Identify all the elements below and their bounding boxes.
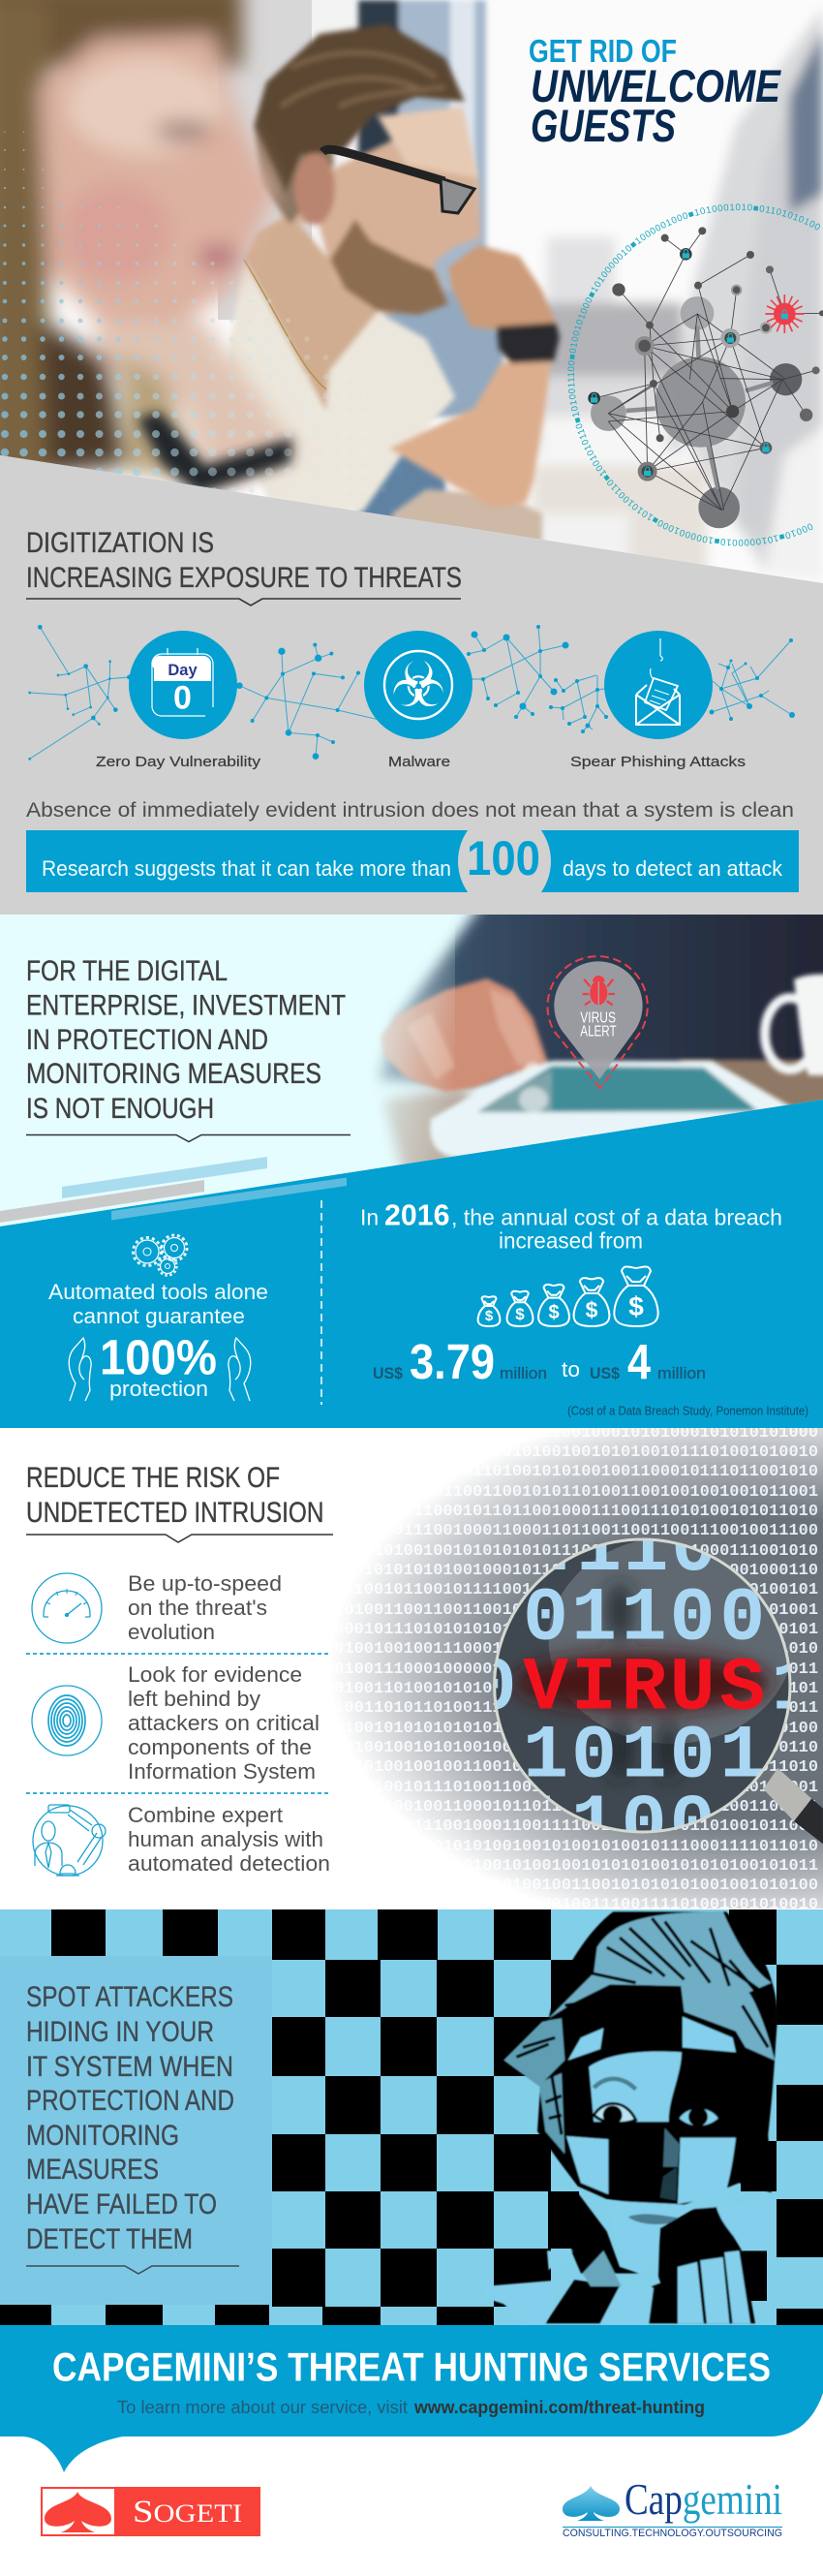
icon: magnifying glass over virus: VIRUS (523, 1645, 765, 1731)
icon: money bags: $ (515, 1305, 525, 1323)
figures: US$3.79 million to US$4 million: US$ (373, 1364, 404, 1382)
binary background: 00101011001001010101001001100101010101001001010100 (324, 1877, 818, 1895)
network lines right (467, 625, 795, 733)
panel: footer call-to-action bubble: www.capgemini.com/threat-hunting (413, 2398, 705, 2417)
logo: Capgemini: CONSULTING.TECHNOLOGY.OUTSOURCING (563, 2528, 782, 2539)
heading: IN PROTECTION AND (26, 1024, 268, 1056)
heading: FOR THE DIGITAL (26, 955, 228, 987)
text: data breach cost: , the annual cost of a data breach (451, 1205, 782, 1230)
decorative stripes (0, 1157, 267, 1223)
binary background: 10101010101010100100011100100010101000101010101000 (324, 1424, 818, 1443)
icon: magnifying glass over virus: 01100 (523, 1576, 765, 1662)
figures: US$3.79 million to US$4 million: to (562, 1357, 580, 1381)
halftone dots (0, 131, 384, 493)
icon: money bags: $ (628, 1291, 644, 1321)
icon: person and robot arm (33, 1805, 106, 1876)
logo: Capgemini (563, 2474, 782, 2539)
figures: US$3.79 million to US$4 million (373, 1334, 706, 1389)
heading: HIDING IN YOUR (26, 2016, 214, 2048)
text: data breach cost (360, 1198, 782, 1254)
icon: zero day calendar: 0 (173, 680, 192, 717)
item: evidence: left behind by (128, 1687, 260, 1711)
item: threat evolution: Be up-to-speed (128, 1571, 282, 1596)
man figure (223, 24, 560, 512)
item: human and automated: Combine expert (128, 1803, 283, 1827)
icon: money bags: $ (485, 1308, 494, 1324)
title (529, 34, 781, 151)
item: threat evolution: evolution (128, 1620, 215, 1644)
binary background: 10001011101010101011001010110100101001010110010101 (324, 1621, 818, 1639)
text: automated tools: protection (109, 1377, 208, 1401)
icon: zero day calendar: Day (168, 662, 198, 679)
logo: Sogeti: SOGETI (133, 2495, 242, 2529)
blurred woman foreground (0, 0, 300, 494)
icon: magnifying glass over virus: 110101 (465, 1713, 765, 1799)
figures: US$3.79 million to US$4 million: million (657, 1364, 706, 1382)
icon: magnifying glass over virus: 1 (772, 1645, 817, 1731)
icon: magnifying glass over virus (493, 1538, 823, 1845)
binary background: 11110100100100110010100100101001011010010101011010 (324, 1758, 818, 1777)
icon: virus alert pin: ALERT (580, 1023, 617, 1040)
binary background: 10100101010101010100101001010010100101001011010100 (324, 1720, 818, 1738)
heading: IS NOT ENOUGH (26, 1093, 214, 1125)
binary background: 10101010010011000101101100110010011001101001100101 (324, 1798, 818, 1816)
binary background: 00100111000100000101001010101001010100110100101011 (324, 1660, 818, 1679)
heading (26, 1462, 333, 1542)
heading: MONITORING MEASURES (26, 1058, 321, 1090)
icon: speedometer (32, 1573, 102, 1643)
icon: virus alert pin (547, 956, 648, 1088)
binary background: 00100110100101010110101001001011001010010010100101 (324, 1680, 818, 1698)
icon: money bags (478, 1266, 658, 1326)
title: GUESTS (531, 100, 676, 151)
panel: footer call-to-action bubble: To learn more about our service, visit (117, 2398, 408, 2417)
binary background: 11010011001100110010010110100101101010001011001001 (324, 1601, 818, 1620)
callout: 100 days: 100 (467, 831, 540, 885)
item: evidence: attackers on critical (128, 1711, 320, 1735)
heading: INCREASING EXPOSURE TO THREATS (26, 562, 462, 594)
icon: fingerprint (32, 1686, 102, 1755)
figures: US$3.79 million to US$4 million: million (500, 1364, 547, 1382)
icon: magnifying glass over virus: 11100 (523, 1506, 769, 1593)
text: data breach cost: increased from (499, 1228, 643, 1254)
callout: 100 days (26, 830, 799, 892)
binary background: 01010010010101001001010100100100101011001010100110 (324, 1739, 818, 1757)
heading: MONITORING (26, 2120, 179, 2152)
logo: Sogeti (41, 2487, 260, 2536)
icon: money bags: $ (548, 1302, 560, 1323)
panel: digitization section (0, 455, 823, 915)
text: automated tools: 100% (100, 1330, 217, 1385)
panel: digital enterprise section (0, 901, 823, 1428)
callout: 100 days: days to detect an attack (563, 856, 783, 881)
text: data breach cost: 2016 (384, 1198, 449, 1232)
threat labels: Spear Phishing Attacks (570, 754, 746, 770)
heading: ENTERPRISE, INVESTMENT (26, 989, 346, 1021)
icon: red virus node (765, 295, 804, 333)
icon: magnifying glass over virus: 0 (472, 1645, 517, 1731)
heading (26, 1981, 239, 2274)
heading: IT SYSTEM WHEN (26, 2051, 233, 2083)
binary background: 00110010110010111100100101001011001010100010100101 (324, 1581, 818, 1599)
heading: HAVE FAILED TO (26, 2188, 217, 2220)
panel: spot attackers section (0, 1909, 823, 2325)
binary background: 01010010011000101101100100011100111010100101011010 (324, 1503, 818, 1521)
checkered face (484, 1911, 777, 2323)
logo: Capgemini: Capgemini (625, 2474, 782, 2524)
heading: SPOT ATTACKERS (26, 1981, 233, 2013)
panel: reduce the risk section (26, 1428, 823, 1909)
item: human and automated: human analysis with (128, 1827, 323, 1851)
icon: spear phishing envelope (604, 631, 713, 739)
blue statistics panel (0, 1100, 823, 1428)
figures: US$3.79 million to US$4 million: 3.79 (410, 1334, 495, 1389)
item: evidence: components of the (128, 1735, 312, 1759)
network lines left (28, 625, 381, 760)
callout: 100 days: Research suggests that it can take more than (42, 856, 451, 881)
binary background: 01010100100101001001010010010101001011101001010010 (324, 1443, 818, 1462)
binary background: 01001101011010011100100100100100101001010100101011 (324, 1699, 818, 1718)
tablet photo (374, 915, 823, 1165)
title: GET RID OF (529, 34, 677, 70)
heading: PROTECTION AND (26, 2085, 234, 2117)
icon: virus alert pin: VIRUS (580, 1009, 616, 1026)
icon: malware biohazard (364, 631, 472, 739)
icon: malware biohazard: ☣ (390, 650, 446, 722)
statement text: Absence of immediately evident intrusion does not mean that a system is clean (26, 799, 794, 822)
binary background: 00100100100111000101001001010010100010100101001010 (324, 1640, 818, 1659)
binary background: 10100110010010011010010101001001100010111011001010 (324, 1463, 818, 1481)
text: automated tools: Automated tools alone (48, 1280, 268, 1304)
binary background: 10101010100100010010100100101010100101010100101011 (324, 1857, 818, 1876)
icon: magnifying glass over virus: 1100 (520, 1783, 716, 1869)
icon: protecting hands (69, 1338, 251, 1401)
figures: US$3.79 million to US$4 million: US$ (590, 1364, 621, 1382)
item: evidence: Information System (128, 1759, 316, 1784)
binary background: 01010100101110100110010010100100101001001010101001 (324, 1779, 818, 1797)
icon: money bags: $ (586, 1297, 598, 1322)
item: human and automated (33, 1803, 330, 1876)
item: evidence (32, 1662, 320, 1784)
item: threat evolution (32, 1571, 282, 1644)
item: evidence: Look for evidence (128, 1662, 302, 1687)
item: human and automated: automated detection (128, 1851, 330, 1876)
binary background: 10101011100100110010010010011100111101001001010010 (324, 1896, 818, 1914)
text panel (0, 1956, 272, 2305)
heading (26, 955, 351, 1141)
heading: DIGITIZATION IS (26, 527, 214, 559)
binary background: 10001010101010010001011010010010101010101001000110 (324, 1562, 818, 1580)
threat labels: Malware (388, 754, 450, 770)
item: threat evolution: on the threat's (128, 1596, 267, 1620)
heading: REDUCE THE RISK OF (26, 1462, 280, 1494)
binary background: 10101001011100100011001111001010011001101001011001 (324, 1817, 818, 1836)
checkerboard (0, 1909, 823, 2325)
heading: DETECT THEM (26, 2223, 193, 2255)
threat labels (96, 754, 746, 770)
heading: MEASURES (26, 2154, 159, 2186)
icon: padlocks (591, 253, 788, 476)
handle (763, 1768, 823, 1844)
binary background: 01000101001001010101010111001011010111000111001010 (324, 1542, 818, 1561)
network graphic with binary ring: 00010■1010000010■1000001000■1010100110■1001010110■1010011100■0100101000■1010000010■1000001000■1010001010■01101010100 (567, 203, 820, 546)
text: automated tools (48, 1280, 268, 1401)
panel: hero photo (0, 0, 823, 591)
binary background: 01010100101010101001001010010100101110001111011010 (324, 1838, 818, 1856)
binary background: 11110100110011001100101011010011001001001001011001 (324, 1483, 818, 1502)
panel: footer call-to-action bubble (0, 2325, 823, 2472)
figures: US$3.79 million to US$4 million: 4 (627, 1334, 652, 1389)
icon: gears (134, 1235, 187, 1275)
text: data breach cost: In (360, 1205, 379, 1230)
binary background (339, 1428, 823, 1909)
heading: UNDETECTED INTRUSION (26, 1497, 323, 1529)
binary background: 10010010111001000110001101100110011001110010011100 (324, 1522, 818, 1540)
heading (26, 527, 462, 605)
threat labels: Zero Day Vulnerability (96, 754, 261, 770)
icon: zero day calendar (129, 631, 237, 739)
text: automated tools: cannot guarantee (73, 1304, 245, 1328)
